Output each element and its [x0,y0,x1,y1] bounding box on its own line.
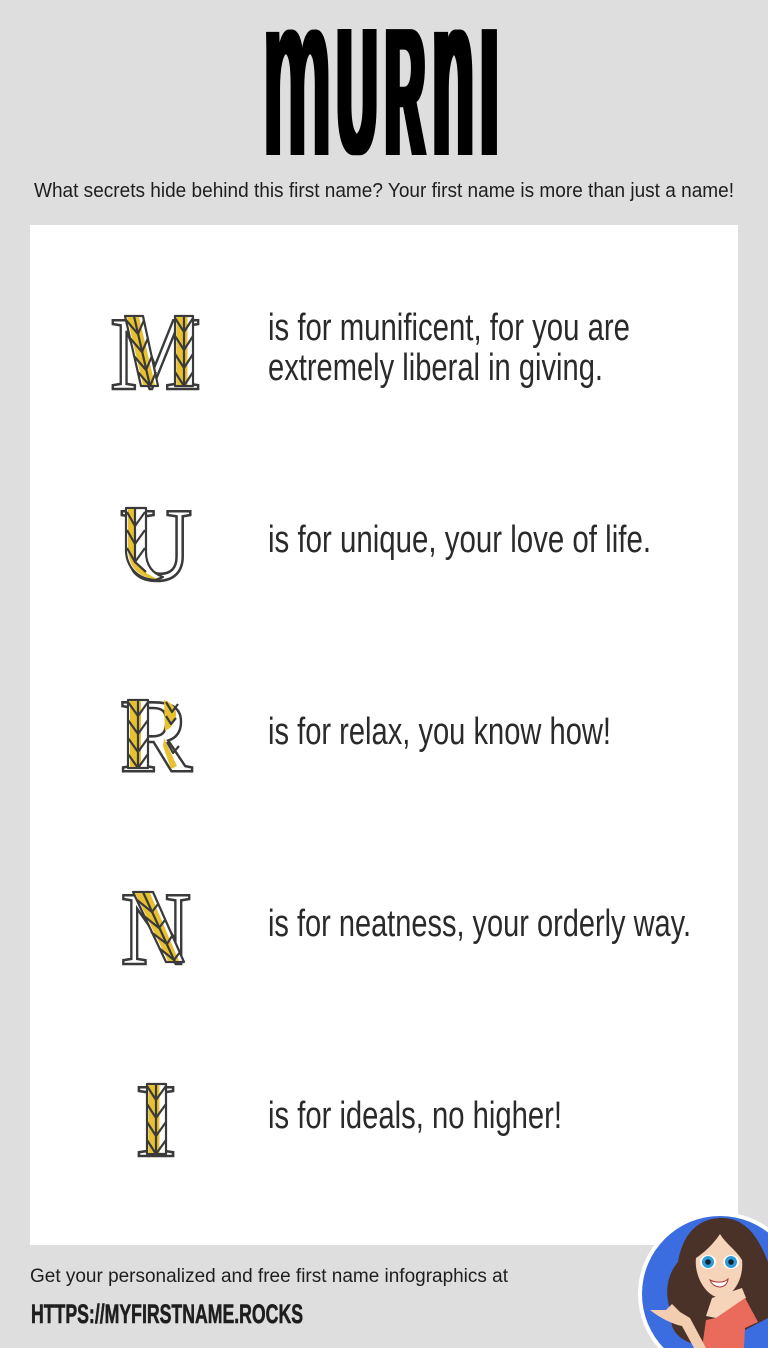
icon: wheat letter I: I [135,1062,177,1179]
icon: avatar woman [638,1212,768,1348]
footer text: Get your personalized and free first name infographics at [30,1266,509,1287]
text: M meaning: is for munificent, for you are [268,307,630,349]
icon: wheat letter N: N [121,871,191,987]
text: U meaning: is for unique, your love of life. [268,519,651,561]
panel: letter meanings [30,225,738,1245]
icon: wheat letter U: U [119,488,193,603]
icon: wheat letter R: R [121,678,193,794]
row: letter R [121,678,611,794]
row: letter U [119,488,651,603]
text: I meaning: is for ideals, no higher! [268,1095,562,1137]
title [262,0,501,205]
icon: wheat letter M: M [111,296,201,412]
footer url: HTTPS://MYFIRSTNAME.ROCKS [31,1299,303,1329]
text: M meaning: extremely liberal in giving. [268,347,603,389]
row: letter M [111,296,630,412]
text: R meaning: is for relax, you know how! [268,711,611,753]
subtitle: What secrets hide behind this first name? Your first name is more than just a name! [34,180,734,202]
text: M meaning [268,307,630,389]
row: letter I [135,1062,562,1179]
row: letter N [121,871,691,987]
